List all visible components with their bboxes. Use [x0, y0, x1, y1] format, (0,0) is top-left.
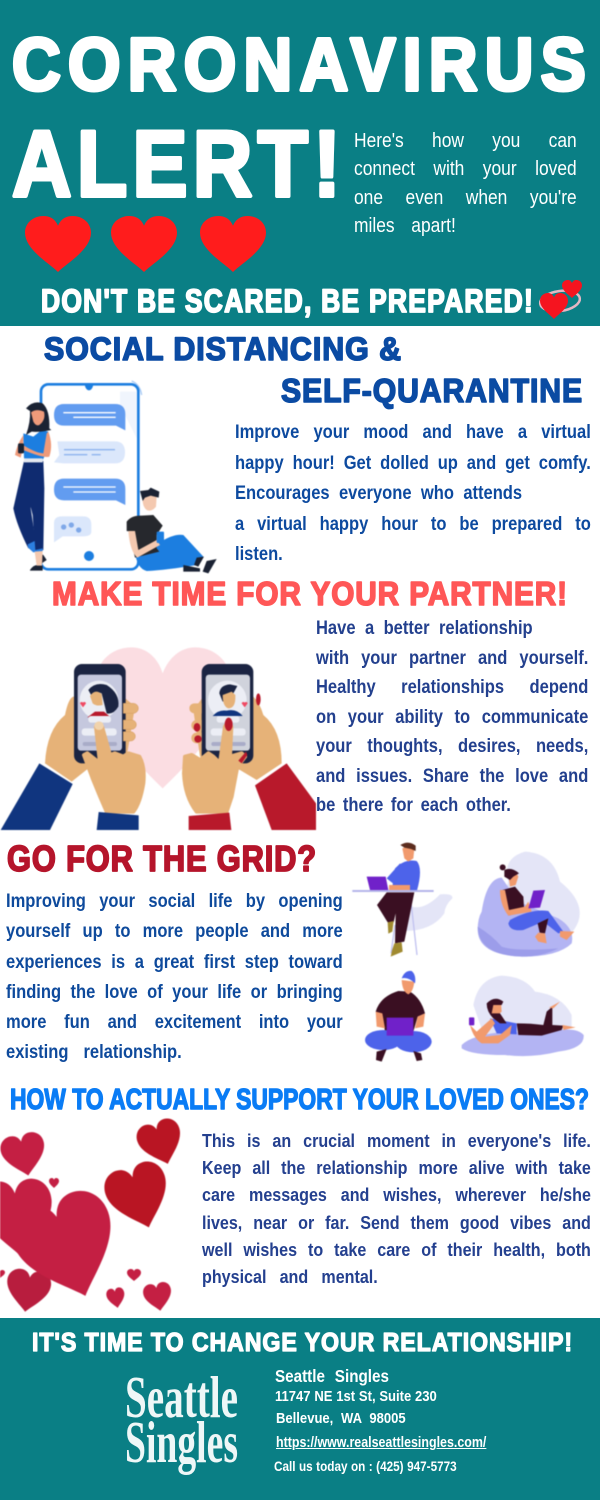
body text: go for the grid: Improving your social life by opening: [6, 891, 343, 912]
body text: go for the grid: [6, 891, 343, 1063]
body text: make time for your partner: [316, 618, 588, 816]
body text: support loved ones: [202, 1130, 591, 1287]
body text: support loved ones: care messages and wishes, wherever he/she: [202, 1184, 591, 1205]
body text: make time for your partner: be there for each other.: [316, 795, 511, 816]
body text: social distancing: listen.: [235, 544, 283, 565]
body text: go for the grid: finding the love of your life or bringing: [6, 982, 343, 1003]
figure: woman lying on cushion: [462, 976, 584, 1056]
body text: social distancing: [235, 422, 591, 565]
body text: support loved ones: physical and mental.: [202, 1266, 378, 1287]
contact details: [274, 1366, 486, 1474]
chat bubble 2: [54, 441, 125, 463]
phone: Call us today on : (425) 947-5773: [274, 1459, 457, 1474]
body text: social distancing: Encourages everyone who attends: [235, 483, 522, 504]
body text: make time for your partner: on your ability to communicate: [316, 706, 588, 728]
chat bubble 1: [54, 404, 125, 430]
body text: make time for your partner: Healthy relationships depend: [316, 677, 588, 698]
illustration: phone with chatting people: [12, 380, 218, 574]
body text: go for the grid: existing relationship.: [6, 1042, 182, 1063]
body text: go for the grid: yourself up to more people and more: [6, 921, 343, 942]
body text: support loved ones: This is an crucial moment in everyone's life.: [202, 1130, 591, 1151]
body text: support loved ones: lives, near or far. Send them good vibes and: [202, 1212, 591, 1233]
body text: make time for your partner: and issues. Share the love and: [316, 766, 588, 786]
illustration: four people on devices: [352, 842, 584, 1062]
figure: woman on beanbag: [478, 852, 580, 957]
panel: header band: [0, 0, 600, 326]
icon: three red hearts: [25, 216, 266, 272]
logo: seattle singles: [125, 1370, 238, 1475]
city: Bellevue, WA 98005: [276, 1410, 406, 1427]
intro text: connect with your loved: [354, 158, 577, 180]
intro text: [354, 130, 577, 237]
chat bubble 3: [54, 479, 125, 505]
body text: make time for your partner: your thoughts, desires, needs,: [316, 736, 588, 757]
website: https://www.realseattlesingles.com/: [276, 1435, 486, 1451]
figure: sitting man: [127, 488, 217, 573]
body text: social distancing: Improve your mood and have a virtual: [235, 422, 591, 443]
figure: man sitting cross-legged: [365, 971, 432, 1062]
body text: social distancing: a virtual happy hour to be prepared to: [235, 514, 591, 534]
chat bubble 4: [54, 516, 91, 542]
business name: Seattle Singles: [275, 1366, 389, 1386]
body text: go for the grid: more fun and excitement into your: [6, 1012, 343, 1033]
body text: support loved ones: Keep all the relationship more alive with take: [202, 1157, 591, 1178]
street address: 11747 NE 1st St, Suite 230: [275, 1388, 437, 1405]
illustration: hands holding phones: [0, 647, 317, 831]
icon: two hearts with ring: [538, 280, 582, 319]
intro text: miles apart!: [354, 215, 456, 237]
left hand and phone: [1, 664, 144, 830]
body text: make time for your partner: Have a better relationship: [316, 618, 533, 639]
body text: social distancing: happy hour! Get dolled up and get comfy.: [235, 452, 591, 474]
body text: make time for your partner: with your partner and yourself.: [316, 648, 588, 668]
figure: man at table: [352, 843, 452, 957]
right hand and phone: [184, 664, 316, 830]
figure: standing woman: [13, 402, 51, 571]
illustration: cluster of hearts: [0, 1118, 181, 1312]
panel: footer band: [0, 1318, 600, 1500]
intro text: one even when you're: [354, 187, 577, 209]
body text: support loved ones: well wishes to take care of their health, both: [202, 1239, 591, 1260]
body text: go for the grid: experiences is a great first step toward: [6, 952, 343, 973]
intro text: Here's how you can: [354, 130, 577, 152]
